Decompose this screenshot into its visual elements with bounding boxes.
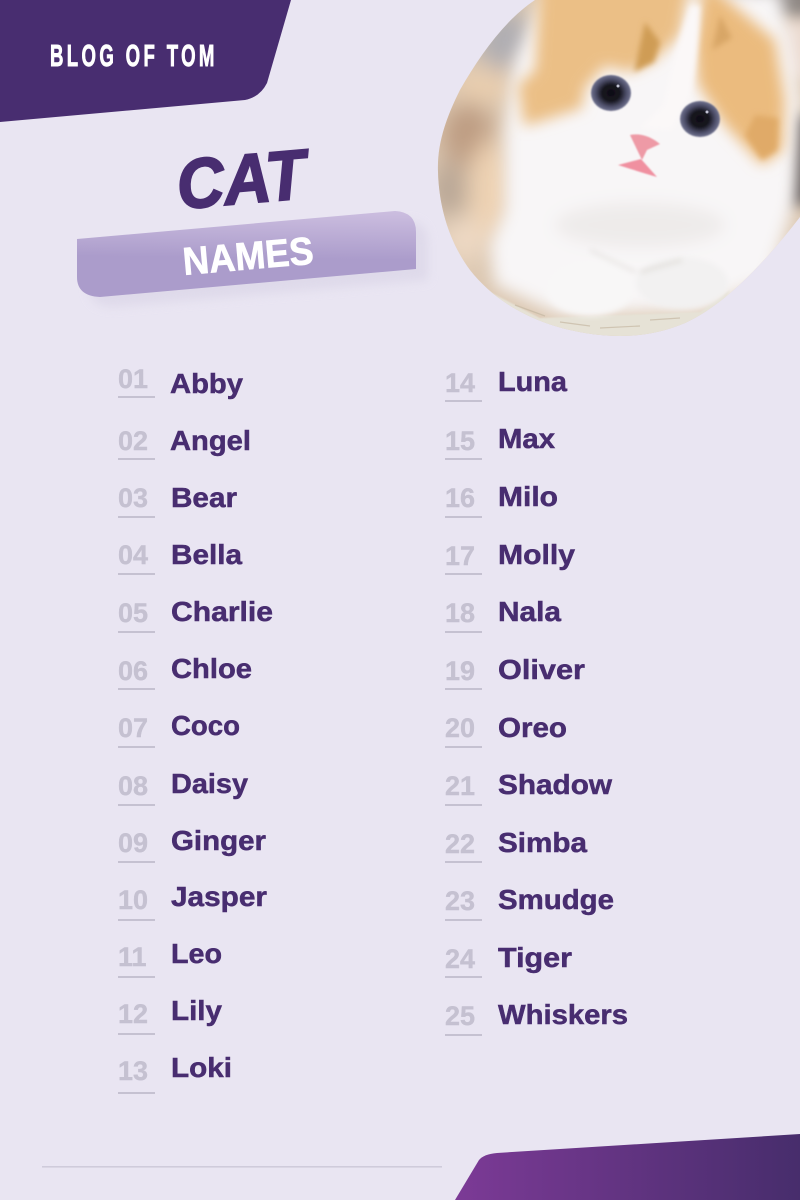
title: CAT: CAT (174, 135, 314, 224)
item 25: 25 (445, 1001, 475, 1031)
item 12: 12 (118, 999, 148, 1029)
item 11 (118, 938, 222, 978)
item 17: Molly (498, 539, 575, 570)
item 11: 11 (118, 942, 147, 972)
item 06 (118, 653, 252, 690)
blog name: BLOG OF TOM (50, 39, 218, 73)
item 16: Milo (498, 481, 558, 512)
cat body (490, 0, 800, 315)
item 10 (118, 881, 267, 921)
item 19: 19 (445, 656, 475, 686)
item 21: 21 (445, 771, 475, 801)
item 06: 06 (118, 656, 148, 686)
item 13 (118, 1052, 232, 1094)
item 17: 17 (445, 541, 475, 571)
item 18 (445, 596, 561, 633)
item 04: 04 (118, 540, 148, 570)
item 20 (445, 712, 567, 748)
right column: names 14-25 (445, 366, 628, 1036)
item 01: Abby (170, 368, 243, 399)
item 12: Lily (171, 995, 222, 1026)
item 05: 05 (118, 598, 148, 628)
item 25 (445, 999, 628, 1036)
left eye (591, 75, 631, 111)
item 21: Shadow (498, 769, 612, 800)
top right background (766, 0, 800, 214)
item 10: Jasper (171, 881, 267, 912)
item 20: 20 (445, 713, 475, 743)
item 04: Bella (171, 539, 242, 570)
header banner (0, 0, 291, 122)
item 11: Leo (171, 938, 222, 969)
title ribbon: NAMES (77, 211, 428, 307)
item 08 (118, 768, 248, 806)
item 14: Luna (498, 366, 567, 397)
item 01: 01 (118, 364, 148, 394)
item 13: Loki (171, 1052, 232, 1083)
item 16 (445, 481, 558, 518)
item 14 (445, 366, 567, 402)
item 15 (445, 423, 555, 460)
item 03 (118, 482, 237, 518)
item 22 (445, 827, 587, 863)
item 17 (445, 539, 575, 575)
item 02 (118, 425, 251, 460)
item 13: 13 (118, 1056, 148, 1086)
item 15: 15 (445, 426, 475, 456)
item 02: 02 (118, 426, 148, 456)
right eye (680, 101, 720, 137)
item 20: Oreo (498, 712, 567, 743)
item 09: Ginger (171, 825, 266, 856)
item 09: 09 (118, 828, 148, 858)
nose and mouth (618, 134, 660, 177)
item 23: 23 (445, 886, 475, 916)
item 04 (118, 539, 242, 575)
item 06: Chloe (171, 653, 252, 684)
photo: kitten in blob shape (430, 0, 800, 345)
item 12 (118, 995, 222, 1035)
item 14: 14 (445, 368, 475, 398)
item 10: 10 (118, 885, 148, 915)
item 05 (118, 596, 273, 633)
item 08: 08 (118, 771, 148, 801)
item 18: Nala (498, 596, 561, 627)
item 02: Angel (170, 425, 251, 456)
item 24: Tiger (498, 942, 572, 973)
title ribbon: NAMES: NAMES (181, 230, 315, 284)
mat (493, 292, 728, 336)
item 08: Daisy (171, 768, 248, 799)
item 07: 07 (118, 713, 148, 743)
item 23 (445, 884, 614, 921)
item 19 (445, 654, 585, 690)
orange fur (518, 0, 785, 165)
item 03: 03 (118, 483, 148, 513)
item 25: Whiskers (498, 999, 628, 1030)
item 23: Smudge (498, 884, 614, 915)
item 03: Bear (171, 482, 237, 513)
item 05: Charlie (171, 596, 273, 627)
left column: names 01-13 (118, 364, 273, 1094)
footer gradient shape (455, 1134, 800, 1200)
item 01 (118, 364, 243, 399)
item 07: Coco (171, 710, 240, 741)
item 21 (445, 769, 612, 806)
darker forehead fur (634, 5, 778, 160)
item 19: Oliver (498, 654, 585, 685)
item 24 (445, 942, 572, 978)
paws (546, 250, 728, 316)
item 07 (118, 710, 240, 748)
item 18: 18 (445, 598, 475, 628)
item 22: 22 (445, 829, 475, 859)
item 15: Max (498, 423, 555, 454)
item 16: 16 (445, 483, 475, 513)
item 09 (118, 825, 266, 863)
item 22: Simba (498, 827, 587, 858)
item 24: 24 (445, 944, 475, 974)
